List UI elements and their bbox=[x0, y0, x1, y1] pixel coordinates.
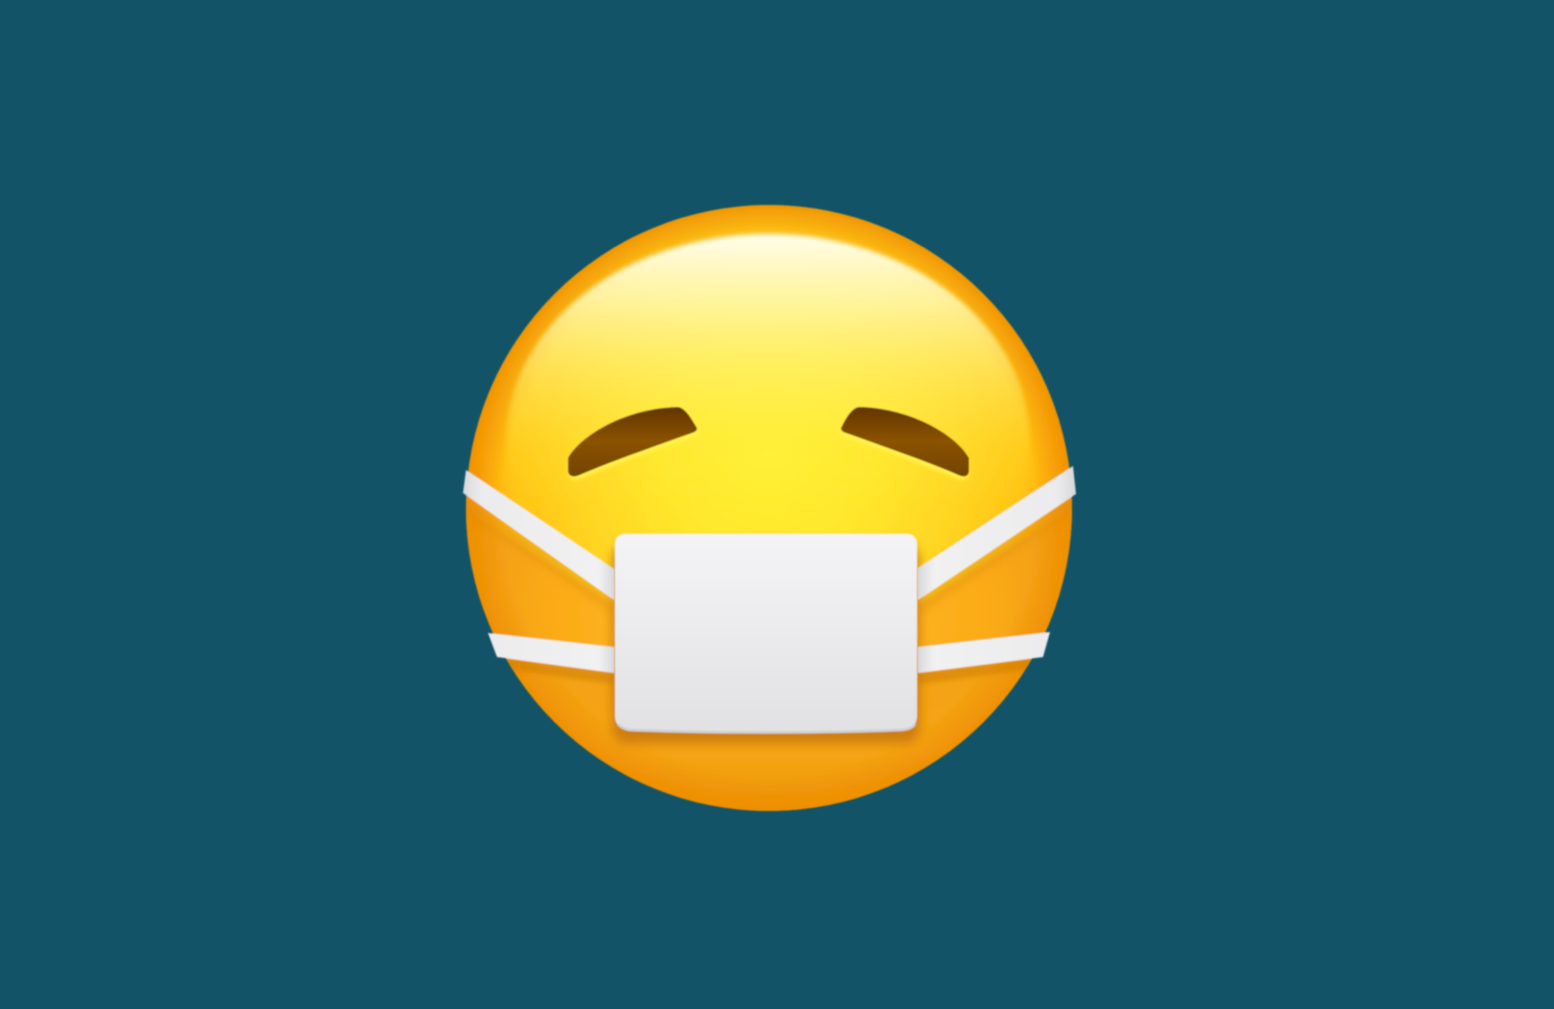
face bbox=[465, 204, 1073, 812]
left eye bbox=[568, 407, 698, 479]
emoji artwork bbox=[440, 205, 1100, 830]
mask shadow bbox=[612, 544, 920, 744]
right eye bbox=[840, 407, 969, 479]
mask bbox=[615, 534, 917, 732]
strap shadows bbox=[466, 497, 1072, 684]
icon: face with medical mask emoji bbox=[462, 204, 1077, 812]
mask straps bbox=[463, 466, 1076, 673]
